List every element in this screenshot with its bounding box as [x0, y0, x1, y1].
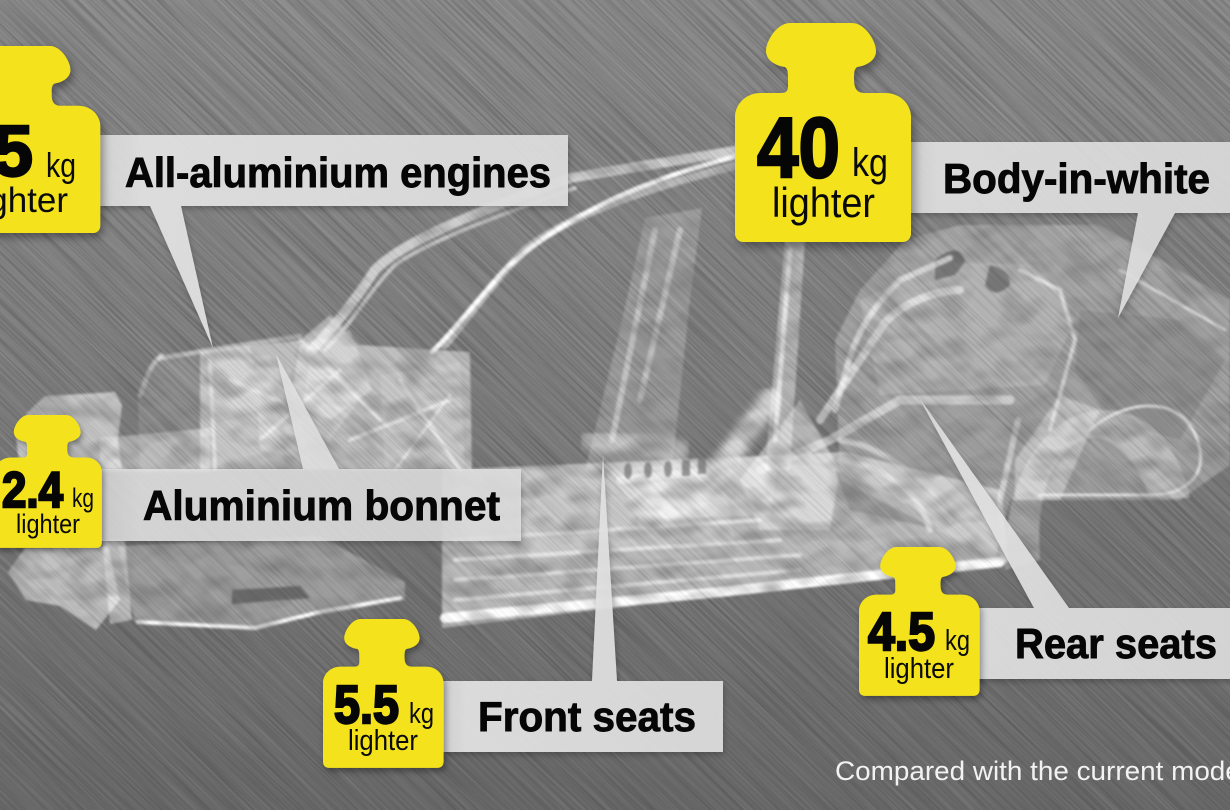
weight icon: 2.4 kg: kg — [72, 483, 94, 513]
label: aluminium bonnet: Aluminium bonnet — [143, 482, 500, 529]
callout: body-in-white — [905, 142, 1230, 318]
lower bright sill — [445, 562, 1000, 618]
floor ribs — [455, 520, 800, 600]
roof rail and A pillar outer — [310, 150, 740, 352]
weight icon: top-left saving — [0, 46, 100, 233]
weight icon: 2.4 kg: lighter — [16, 509, 80, 539]
car body-in-white structure — [8, 150, 1230, 630]
engine bay — [200, 315, 472, 470]
A pillar inner door frame — [432, 156, 738, 352]
bright patches — [205, 345, 360, 460]
weight icon: 5.5 kg: lighter — [348, 725, 418, 757]
weight icon: 4.5 kg: lighter — [884, 653, 954, 685]
weight icon: top-left saving: kg — [46, 147, 76, 185]
B pillar — [585, 208, 702, 470]
weight icon: 2.4 kg: 2.4 — [2, 462, 63, 518]
rear arch — [1005, 410, 1190, 570]
callout: aluminium bonnet — [98, 354, 521, 541]
sill vent holes — [624, 458, 706, 479]
weight icon: 40 kg: 40 — [757, 101, 840, 196]
weight icon: 40 kg — [735, 23, 911, 242]
callout: rear seats — [918, 396, 1230, 679]
weight icon: 5.5 kg: kg — [409, 698, 434, 730]
callout: front seats — [438, 455, 723, 752]
label: front seats: Front seats — [478, 693, 696, 740]
label: all-aluminium engines: All-aluminium engines — [125, 149, 551, 196]
callout: all-aluminium engines — [95, 135, 568, 348]
weight icon: 2.4 kg — [0, 415, 102, 548]
fender — [138, 348, 205, 470]
weight icon: 5.5 kg: 5.5 — [334, 675, 399, 735]
footnote: Compared with the current model — [835, 756, 1230, 786]
label: rear seats: Rear seats — [1015, 620, 1217, 667]
front rails — [100, 428, 210, 472]
centre bright node — [740, 400, 840, 530]
rear structure — [835, 225, 1230, 560]
weight icon: 5.5 kg — [323, 619, 444, 768]
weight icon: 40 kg: lighter — [772, 179, 875, 226]
label: body-in-white: Body-in-white — [943, 155, 1210, 202]
weight icon: 4.5 kg: 4.5 — [868, 602, 935, 662]
weight icon: 4.5 kg — [859, 547, 980, 696]
C pillar — [765, 240, 805, 470]
weight icon: 40 kg: kg — [852, 141, 888, 185]
front bumper module — [15, 392, 122, 470]
hood line — [160, 336, 300, 358]
floor plate — [118, 536, 405, 626]
weight icon: 4.5 kg: kg — [945, 625, 970, 657]
front floor — [442, 452, 1008, 628]
rear quarter — [1015, 395, 1100, 500]
